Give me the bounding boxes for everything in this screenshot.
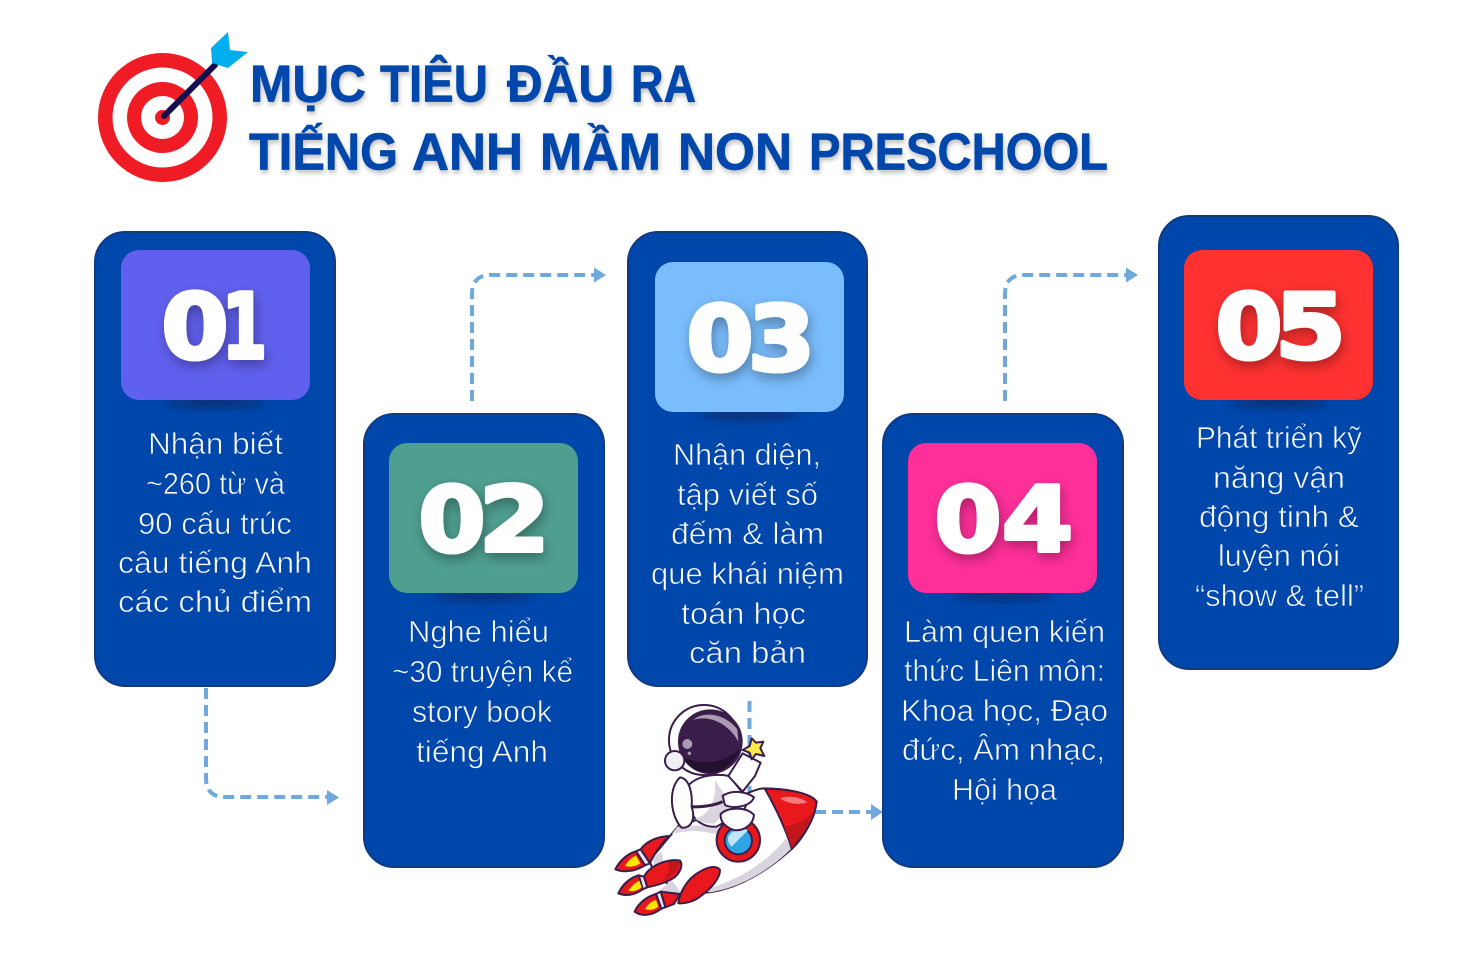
title — [249, 54, 1108, 182]
arrow: step 2 to step 3 — [472, 268, 606, 401]
panel: step 01 — [95, 232, 335, 686]
number tile 05 — [1184, 250, 1373, 400]
number tile 04 — [908, 443, 1097, 593]
number tile 05: 5 — [1275, 275, 1346, 380]
title: PRESCHOOL — [809, 124, 1108, 182]
panel: step 03 — [628, 232, 867, 686]
text: step 05 — [1195, 420, 1364, 613]
text: step 01 — [118, 426, 312, 619]
text: step 03: Nhận diện, — [673, 437, 821, 472]
rocket nose cone — [765, 789, 817, 848]
number tile 04: 0 — [934, 467, 1001, 572]
rocket window — [717, 818, 760, 862]
rocket fin — [678, 867, 720, 903]
arrow: step 1 to step 2 — [206, 688, 339, 805]
icon: target with dart — [98, 32, 248, 182]
number tile 02: 2 — [479, 468, 550, 573]
text: step 05: “show & tell” — [1195, 578, 1364, 613]
title: ĐẦU — [507, 54, 614, 114]
text: step 05: Phát triển kỹ — [1196, 420, 1362, 455]
arrow: step 4 to step 5 — [1005, 268, 1138, 401]
text: step 05: động tinh & — [1199, 499, 1359, 534]
illustration: astronaut riding rocket — [615, 705, 817, 915]
number tile 02: 0 — [418, 467, 485, 572]
rear thrusters and flames — [615, 836, 681, 915]
text: step 05: năng vận — [1213, 460, 1345, 495]
text: step 05: luyện nói — [1218, 538, 1340, 573]
text: step 01: 90 cấu trúc — [138, 506, 292, 541]
number tile 04: 4 — [1002, 468, 1073, 573]
text: step 03: đếm & làm — [671, 516, 824, 551]
number tile 01 — [121, 250, 310, 400]
number tile 05: 0 — [1216, 274, 1282, 379]
panel: step 04 — [883, 414, 1123, 867]
number tile 01: 0 — [162, 274, 228, 379]
title: ANH — [412, 124, 523, 182]
title: TIÊU — [380, 54, 488, 114]
number tile 01: 1 — [222, 275, 267, 380]
number tile 02 — [389, 443, 578, 593]
text: step 04: thức Liên môn: — [904, 653, 1105, 688]
text: step 03: que khái niệm — [651, 556, 844, 591]
text: step 03: căn bản — [689, 635, 806, 670]
text: step 04 — [901, 614, 1108, 807]
number tile 03: 3 — [748, 286, 815, 391]
text: step 02: ~30 truyện kể — [392, 654, 573, 689]
arrow: step 3 to step 4 — [750, 701, 883, 820]
text: step 04: Khoa học, Đạo — [901, 693, 1108, 728]
star — [743, 738, 764, 759]
panel: step 05 — [1159, 216, 1398, 669]
text: step 02: Nghe hiểu — [408, 614, 549, 649]
title: RA — [631, 56, 696, 114]
astronaut helmet — [665, 705, 742, 775]
text: step 04: đức, Âm nhạc, — [902, 732, 1105, 767]
text: step 03 — [651, 437, 844, 670]
text: step 01: Nhận biết — [148, 426, 283, 461]
text: step 01: ~260 từ và — [146, 466, 286, 501]
number tile 03 — [655, 262, 844, 412]
text: step 04: Làm quen kiến — [904, 614, 1105, 649]
text: step 01: các chủ điểm — [118, 584, 312, 619]
title: MỤC — [250, 56, 366, 114]
rocket body — [650, 788, 817, 894]
text: step 04: Hội họa — [952, 772, 1058, 807]
title: NON — [678, 124, 792, 182]
text: step 01: câu tiếng Anh — [118, 545, 312, 580]
title: TIẾNG — [249, 122, 398, 182]
number tile 03: 0 — [686, 286, 753, 391]
text: step 03: tập viết số — [677, 477, 818, 512]
title: MẦM — [540, 122, 661, 182]
text: step 02: story book — [412, 694, 552, 729]
panel: step 02 — [364, 414, 604, 867]
text: step 03: toán học — [681, 596, 806, 631]
text: step 02: tiếng Anh — [416, 734, 548, 769]
text: step 02 — [392, 614, 573, 769]
astronaut suit — [672, 753, 761, 830]
